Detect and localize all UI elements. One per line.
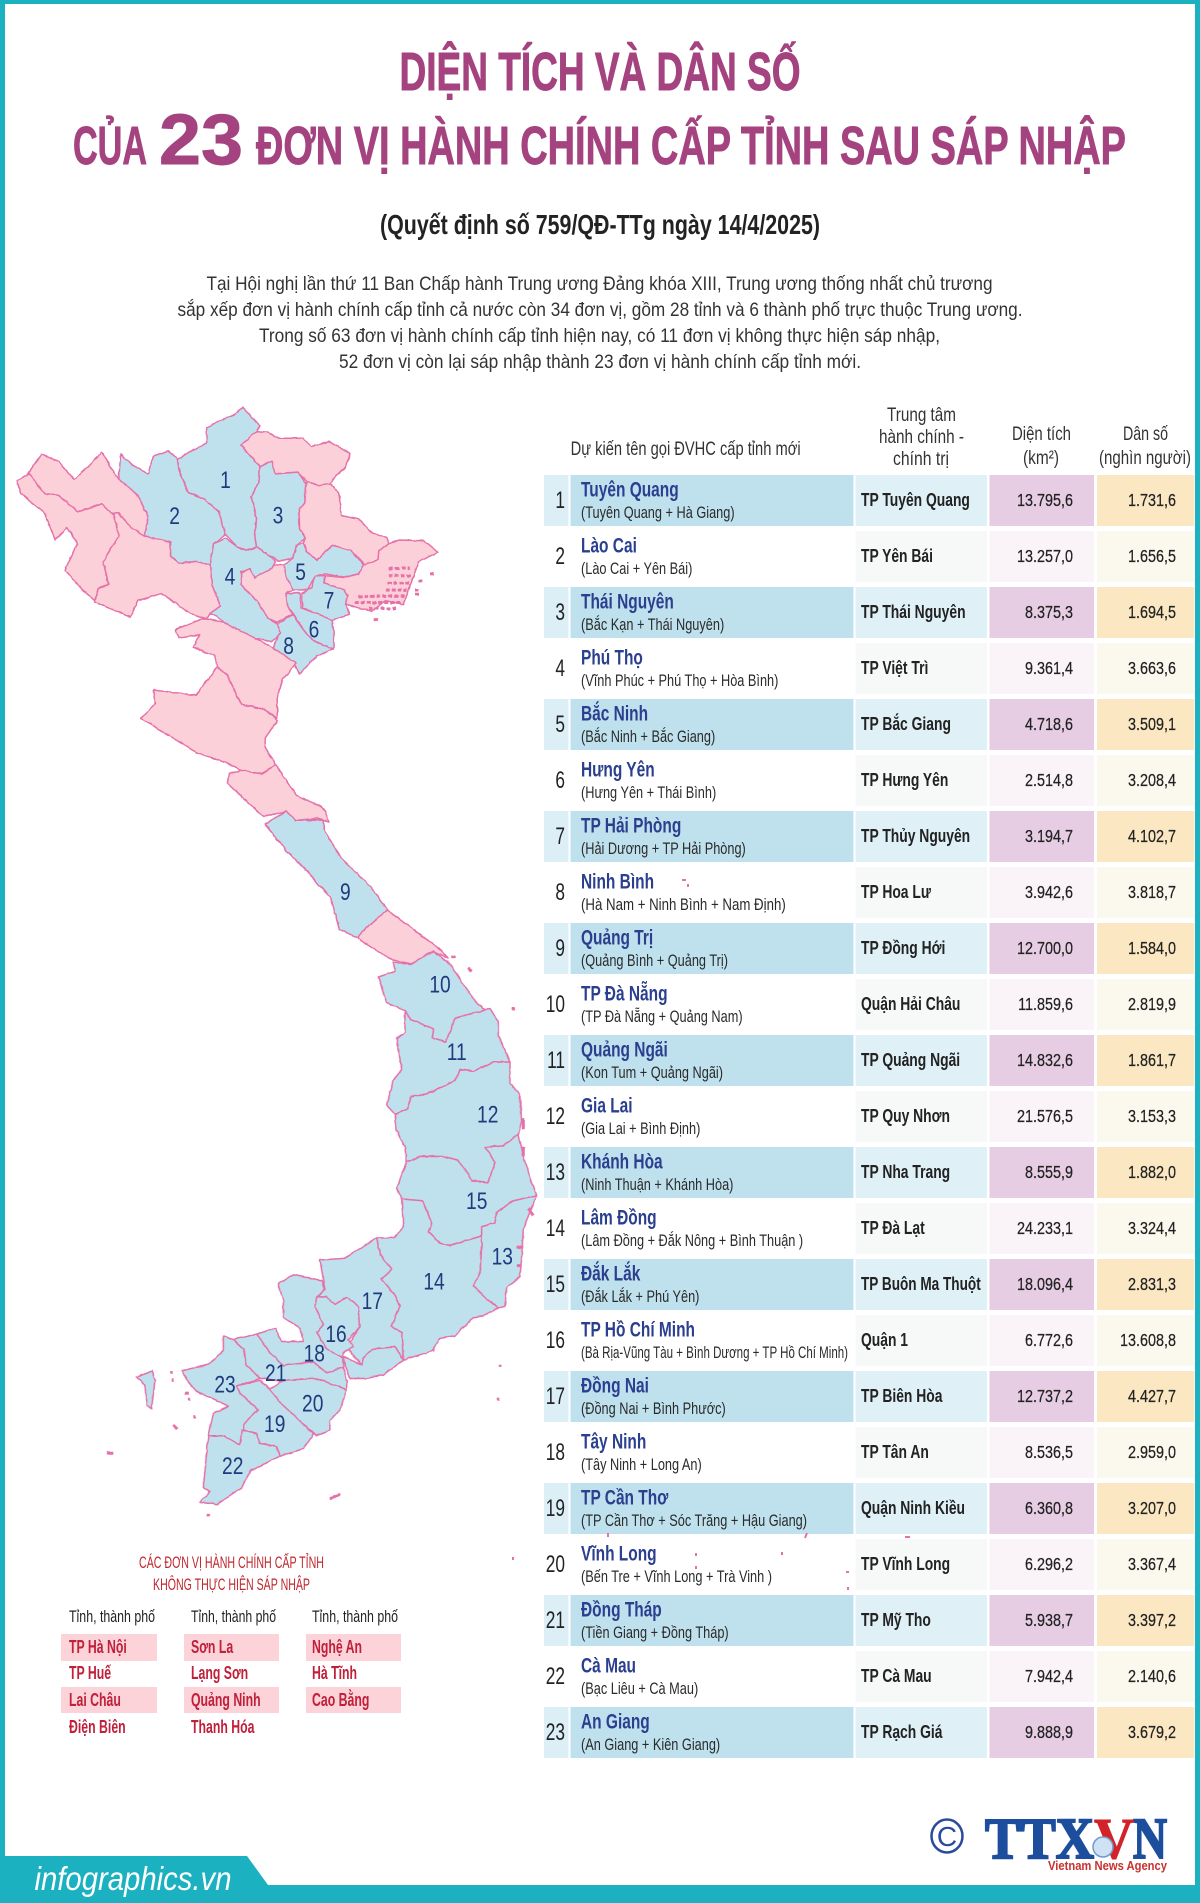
row 19 [544,1483,1194,1534]
row 21 [544,1595,1194,1646]
row 2 [555,531,1194,582]
legend province names: TP Huế [69,1664,111,1684]
row 20: Vĩnh Long [581,1541,657,1565]
row 5: TP Bắc Giang [861,713,951,735]
map labels: 22 [222,1452,243,1480]
row 2: 2 [555,543,565,570]
region 1 Tuyên Quang [177,407,260,551]
row 16 [546,1315,1194,1366]
row 15: 18.096,4 [1017,1275,1073,1294]
southern islands [107,957,533,1515]
row 6: TP Hưng Yên [861,770,948,791]
legend column headers [69,1608,398,1626]
row 12 [546,1091,1194,1142]
row 6: 6 [555,767,565,794]
row 17: Đồng Nai [581,1373,649,1397]
row 2: 1.656,5 [1128,547,1176,566]
Phú Quốc island [137,1371,155,1408]
row 14: 24.233,1 [1017,1219,1073,1238]
row 10 [546,979,1194,1030]
row 1: Tuyên Quang [581,477,679,501]
row 7: TP Thủy Nguyên [861,826,970,847]
legend province names: Thanh Hóa [191,1718,255,1738]
table of 23 new provinces [544,404,1194,1758]
map labels: 15 [466,1187,487,1215]
row 21: 3.397,2 [1128,1611,1176,1630]
row 10: TP Đà Nẵng [581,980,668,1005]
map of Vietnam [17,407,537,1515]
row 10: 11.859,6 [1018,995,1073,1014]
table header: chính trị [893,448,949,470]
region 6 Hưng Yên [286,593,334,649]
row 15: TP Buôn Ma Thuột [861,1274,981,1295]
map labels: 18 [304,1340,325,1367]
row 4 [555,643,1194,694]
row 11: (Kon Tum + Quảng Ngãi) [581,1063,723,1083]
Hà Tĩnh [227,765,329,822]
row 6: 2.514,8 [1025,771,1073,790]
row 3: TP Thái Nguyên [861,602,966,623]
legend heading: CÁC ĐƠN VỊ HÀNH CHÍNH CẤP TỈNH [139,1553,324,1572]
title: DIỆN TÍCH VÀ DÂN SỐ [400,41,800,102]
legend highlight boxes [61,1634,401,1713]
row 12: 12 [546,1103,565,1130]
row 9: 1.584,0 [1128,939,1176,958]
row 10: 2.819,9 [1128,995,1176,1014]
table header: Trung tâm [887,404,956,426]
row 5 [544,699,1194,750]
legend province names: Sơn La [191,1638,233,1658]
row 23: (An Giang + Kiên Giang) [581,1735,720,1755]
region 14 Lâm Đồng [377,1199,498,1360]
row 4: TP Việt Trì [861,658,928,679]
row 5: 3.509,1 [1128,715,1176,734]
row 1: 1 [555,487,565,514]
table header: hành chính - [879,426,964,448]
row 21: (Tiền Giang + Đồng Tháp) [581,1623,729,1643]
region 15 Đắk Lắk [397,1134,537,1245]
map labels: 5 [295,558,306,586]
map labels: 20 [302,1390,323,1417]
row 13: TP Nha Trang [861,1162,950,1183]
row 4: (Vĩnh Phúc + Phú Thọ + Hòa Bình) [581,671,778,691]
row 17: 12.737,2 [1017,1387,1073,1406]
row 9 [544,923,1194,974]
row 10: 10 [546,991,565,1018]
table header: Diện tích [1012,423,1071,445]
row 18: 8.536,5 [1025,1443,1073,1462]
row 17: 4.427,7 [1128,1387,1176,1406]
row 8: TP Hoa Lư [861,882,931,903]
row 13: 13 [546,1159,565,1186]
row 19: 3.207,0 [1128,1499,1176,1518]
row 22: Cà Mau [581,1653,636,1677]
legend province names: Lai Châu [69,1691,121,1711]
title: 23 [159,101,243,180]
region 5 Bắc Ninh [284,544,363,590]
Điện Biên [17,474,119,601]
row 12: 21.576,5 [1017,1107,1073,1126]
map labels: 8 [283,632,294,660]
row 22: 2.140,6 [1128,1667,1176,1686]
legend province names: TP Hà Nội [69,1638,127,1658]
row 3: Thái Nguyên [581,589,674,613]
map labels: 7 [324,587,334,614]
Quảng Ninh [324,540,438,611]
row 2: Lào Cai [581,533,637,557]
intro paragraph: Tại Hội nghị lần thứ 11 Ban Chấp hành Trung ương Đảng khóa XIII, Trung ương thống nhất chủ trương [206,273,992,295]
region 19 TP Cần Thơ [237,1380,313,1456]
row 4: Phú Thọ [581,645,643,669]
row 8: (Hà Nam + Ninh Bình + Nam Định) [581,896,786,914]
row 1: (Tuyên Quang + Hà Giang) [581,503,735,523]
region 21 Đồng Tháp [233,1334,347,1390]
row 14: (Lâm Đồng + Đắk Nông + Bình Thuận ) [581,1231,803,1251]
legend column headers: Tỉnh, thành phố [191,1608,276,1626]
title: CỦA [73,116,147,176]
region 3 Thái Nguyên [251,461,307,561]
row 11: 1.861,7 [1128,1051,1176,1070]
row 2: TP Yên Bái [861,546,933,567]
row 23 [544,1707,1194,1758]
row 12: 3.153,3 [1128,1107,1176,1126]
region 7 Hải Phòng [301,576,350,620]
row 21: Đồng Tháp [581,1597,662,1621]
row 18: 2.959,0 [1128,1443,1176,1462]
row 9: Quảng Trị [581,925,653,949]
region 17 Đồng Nai [317,1238,403,1366]
scattered specks over table [513,880,910,1590]
row 13: Khánh Hòa [581,1149,663,1173]
row 9: (Quảng Bình + Quảng Trị) [581,951,728,971]
row 13: 1.882,0 [1128,1163,1176,1182]
copyright symbol [932,1820,962,1852]
row 3: 3 [555,599,565,626]
row 1: TP Tuyên Quang [861,490,970,511]
row 23: 3.679,2 [1128,1723,1176,1742]
row 13: (Ninh Thuận + Khánh Hòa) [581,1175,733,1195]
legend province names: Cao Bằng [312,1688,369,1711]
row 14: TP Đà Lạt [861,1218,925,1239]
row 9: 9 [555,935,565,962]
region 10 TP Đà Nẵng [378,951,485,1042]
row 8: 3.942,6 [1025,883,1073,902]
Ha Long islands [355,569,434,620]
row 8: 8 [555,879,565,906]
row 3: 1.694,5 [1128,603,1176,622]
row 11: 11 [547,1047,565,1074]
row 14: Lâm Đồng [581,1205,657,1229]
row 12: (Gia Lai + Bình Định) [581,1119,700,1139]
row 13: 8.555,9 [1025,1163,1073,1182]
legend column headers: Tỉnh, thành phố [69,1608,155,1626]
row 4: 9.361,4 [1025,659,1073,678]
row 1: 13.795,6 [1017,491,1073,510]
map labels: 23 [214,1370,236,1398]
TTXVN logo [985,1806,1167,1873]
map labels: 10 [429,970,451,998]
row 15 [544,1259,1194,1310]
map labels: 14 [423,1268,445,1295]
row 20 [546,1539,1194,1590]
intro paragraph: Trong số 63 đơn vị hành chính cấp tỉnh hiện nay, có 11 đơn vị không thực hiện sáp nhập, [259,325,940,347]
row 18: Tây Ninh [581,1429,646,1453]
row 8 [555,867,1194,918]
row 7 [544,811,1194,862]
row 15: Đắk Lắk [581,1261,641,1285]
row 22 [546,1651,1194,1702]
map labels: 2 [169,502,180,530]
row 6: Hưng Yên [581,757,655,781]
row 8: 3.818,7 [1128,883,1176,902]
legend province names: Lạng Sơn [191,1664,248,1684]
row 20: 6.296,2 [1025,1555,1073,1574]
region 9 Quảng Trị [265,811,387,938]
TTXVN logo: TTX [985,1806,1094,1871]
map labels: 9 [340,878,351,906]
row 7: 7 [555,823,565,850]
legend: provinces not merged [61,1553,401,1738]
region 23 An Giang [182,1336,260,1445]
row 23: TP Rạch Giá [861,1722,943,1743]
row 11: 14.832,6 [1017,1051,1073,1070]
map labels [169,466,513,1480]
row 21: TP Mỹ Tho [861,1610,931,1631]
row 20: 3.367,4 [1128,1555,1176,1574]
row 12: TP Quy Nhơn [861,1106,950,1127]
row 22: TP Cà Mau [861,1666,932,1687]
row 6: (Hưng Yên + Thái Bình) [581,783,716,803]
Sơn La [95,513,220,619]
row 21: 5.938,7 [1025,1611,1073,1630]
table header: (km²) [1023,447,1059,469]
legend heading: KHÔNG THỰC HIỆN SÁP NHẬP [153,1575,310,1594]
legend province names: Hà Tĩnh [312,1664,357,1684]
row 22: 22 [546,1663,565,1690]
row 18 [546,1427,1194,1478]
row 22: 7.942,4 [1025,1667,1073,1686]
row 16: TP Hồ Chí Minh [581,1317,695,1341]
Lai Châu [28,452,148,536]
row 17: TP Biên Hòa [861,1386,943,1407]
row 1: 1.731,6 [1128,491,1176,510]
row 19: 19 [546,1495,565,1522]
row 16: Quận 1 [861,1330,908,1351]
row 3: 8.375,3 [1025,603,1073,622]
legend province names: Nghệ An [312,1638,362,1658]
region 16 TP Hồ Chí Minh [315,1297,403,1378]
Lạng Sơn [299,481,389,565]
legend column headers: Tỉnh, thành phố [312,1608,398,1626]
row 18: 18 [546,1439,565,1466]
row 9: TP Đồng Hới [861,938,945,959]
row 1 [544,475,1194,526]
row 18: TP Tân An [861,1442,929,1463]
row 23: 23 [546,1719,565,1746]
row 5: 5 [555,711,565,738]
table header [571,404,1191,470]
row 10: (TP Đà Nẵng + Quảng Nam) [581,1007,743,1027]
legend province names [69,1638,369,1738]
row 15: 2.831,3 [1128,1275,1176,1294]
row 8: Ninh Bình [581,869,654,893]
row 2: (Lào Cai + Yên Bái) [581,559,692,579]
map labels: 17 [362,1287,383,1315]
row 16: 6.772,6 [1025,1331,1073,1350]
map labels: 6 [309,615,319,643]
row 3: (Bắc Kạn + Thái Nguyên) [581,615,724,635]
row 16: 13.608,8 [1120,1331,1176,1350]
map labels: 4 [225,563,235,590]
row 20: (Bến Tre + Vĩnh Long + Trà Vinh ) [581,1567,772,1587]
row 4: 4 [555,655,565,682]
region 22 Cà Mau [200,1430,280,1504]
Thanh Hóa [176,619,296,719]
row 16: (Bà Rịa-Vũng Tàu + Bình Dương + TP Hồ Chí Minh) [581,1343,848,1362]
map labels: 1 [220,466,231,494]
row 20: TP Vĩnh Long [861,1554,950,1575]
row 15: (Đắk Lắk + Phú Yên) [581,1287,699,1307]
region 18 Tây Ninh [257,1275,343,1373]
row 18: (Tây Ninh + Long An) [581,1455,702,1475]
row 14: 14 [546,1215,565,1242]
row 19: 6.360,8 [1025,1499,1073,1518]
map labels: 3 [273,502,283,529]
copyright symbol: C [937,1821,957,1852]
map labels: 21 [265,1359,286,1387]
row 5: 4.718,6 [1025,715,1073,734]
region 4 Phú Thọ [210,538,281,642]
row 19: TP Cần Thơ [581,1485,669,1509]
row 7: (Hải Dương + TP Hải Phòng) [581,839,746,859]
row 23: An Giang [581,1709,650,1733]
row 3 [544,587,1194,638]
map labels: 12 [477,1100,498,1128]
row 7: TP Hải Phòng [581,813,681,837]
row 5: Bắc Ninh [581,701,648,725]
map labels: 16 [325,1320,347,1348]
title [73,41,1126,180]
region 13 Khánh Hòa [473,1195,537,1308]
Hà Nội [241,565,293,622]
row 10: Quận Hải Châu [861,994,960,1015]
footer tab [0,1856,1200,1903]
legend province names: Điện Biên [69,1718,126,1738]
row 6: 3.208,4 [1128,771,1176,790]
map labels: 11 [447,1038,467,1066]
map labels: 19 [264,1410,285,1438]
row 6 [555,755,1194,806]
row 2: 13.257,0 [1017,547,1073,566]
row 23: 9.888,9 [1025,1723,1073,1742]
table header: Dự kiến tên gọi ĐVHC cấp tỉnh mới [571,438,801,460]
legend province names: Quảng Ninh [191,1691,261,1711]
TTXVN logo: Vietnam News Agency [1048,1859,1167,1873]
website text: infographics.vn [34,1860,232,1897]
row 13 [544,1147,1194,1198]
row 17 [544,1371,1194,1422]
row 16: 16 [546,1327,565,1354]
region 8 Ninh Bình [272,615,333,674]
row 19: Quận Ninh Kiều [861,1498,965,1519]
Cao Bằng [241,431,351,486]
row 7: 4.102,7 [1128,827,1176,846]
legend heading [139,1553,324,1594]
row 14: 3.324,4 [1128,1219,1176,1238]
row 9: 12.700,0 [1017,939,1073,958]
row 11: Quảng Ngãi [581,1037,668,1061]
region 11 Quảng Ngãi [387,1008,510,1114]
intro paragraph: sắp xếp đơn vị hành chính cấp tỉnh cả nước còn 34 đơn vị, gồm 28 tỉnh và 6 thành phố trực thuộc Trung ương. [178,298,1022,321]
map labels: 13 [492,1242,513,1270]
row 21: 21 [546,1607,565,1634]
TTXVN logo: N [1133,1806,1167,1871]
row 5: (Bắc Ninh + Bắc Giang) [581,727,715,747]
row 4: 3.663,6 [1128,659,1176,678]
row 12: Gia Lai [581,1093,633,1117]
TP Huế [358,910,448,964]
row 22: (Bạc Liêu + Cà Mau) [581,1679,698,1699]
intro paragraph [178,273,1022,373]
row 15: 15 [546,1271,565,1298]
subtitle: (Quyết định số 759/QĐ-TTg ngày 14/4/2025) [380,209,820,240]
region 12 Gia Lai [395,1062,522,1182]
row 11: TP Quảng Ngãi [861,1050,960,1071]
table header: Dân số [1123,423,1168,445]
Nghệ An [141,667,277,774]
row 20: 20 [546,1551,565,1578]
TTXVN logo: V [1094,1806,1134,1871]
row 17: (Đồng Nai + Bình Phước) [581,1399,726,1419]
row 14 [546,1203,1194,1254]
row 19: (TP Cần Thơ + Sóc Trăng + Hậu Giang) [581,1511,807,1531]
row 7: 3.194,7 [1025,827,1073,846]
row 17: 17 [546,1383,565,1410]
region 20 Vĩnh Long [270,1378,347,1436]
row 11 [544,1035,1194,1086]
intro paragraph: 52 đơn vị còn lại sáp nhập thành 23 đơn vị hành chính cấp tỉnh mới. [339,351,861,373]
region 2 Lào Cai [119,451,226,565]
